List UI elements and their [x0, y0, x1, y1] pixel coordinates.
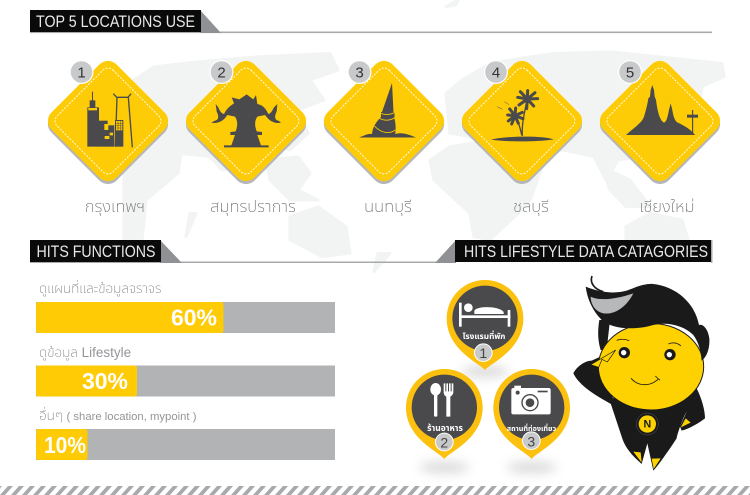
heading: hits lifestyle data categories: HITS LIFESTYLE DATA CATAGORIES [464, 242, 708, 261]
mascot [573, 276, 709, 471]
bar: others 10% [36, 406, 335, 460]
heading: hits functions [30, 240, 436, 263]
label: สมุทรปราการ [210, 198, 296, 217]
label: เชียงใหม่ [639, 198, 695, 216]
chest badge [636, 413, 658, 435]
eyes [619, 347, 676, 360]
bar: lifestyle 30%: ดูข้อมูล Lifestyle [39, 345, 131, 361]
heading: hits lifestyle data categories [435, 240, 712, 263]
location 3: Nonthaburi [319, 56, 449, 217]
bar: maps and traffic 60%: ดูแผนที่และข้อมูลจราจร [39, 279, 161, 297]
pin 3: attractions: 3 [527, 434, 535, 450]
chest badge: N [643, 419, 651, 431]
location 5: Chiang Mai [595, 56, 725, 216]
bar: others 10%: อื่นๆ ( share location, mypoint ) [39, 406, 197, 423]
number badge 3: 3 [355, 64, 364, 82]
heading: top 5 locations use [30, 10, 712, 33]
raised arm [573, 350, 615, 405]
pin 1: hotel: โรงแรมที่พัก [463, 330, 505, 341]
heading: hits functions: HITS FUNCTIONS [36, 242, 156, 261]
pin 1: hotel [447, 280, 523, 370]
pin 2: restaurant: 2 [440, 434, 448, 450]
bar: maps and traffic 60% [36, 279, 335, 333]
hair back sliver [598, 320, 610, 350]
hand right [681, 418, 691, 427]
curl [591, 276, 603, 292]
eyebrows and mouth [617, 339, 681, 385]
hair [586, 284, 709, 361]
icon: temple and sign [626, 85, 698, 135]
icon: spoon and fork [430, 383, 453, 417]
pin 2: restaurant [406, 369, 483, 459]
pin shadows [419, 366, 557, 473]
number badge 5: 5 [626, 64, 634, 82]
heading: top 5 locations use: TOP 5 LOCATIONS USE [36, 12, 195, 31]
bar: lifestyle 30% [36, 345, 335, 396]
label: กรุงเทพฯ [85, 198, 145, 217]
bar chart: hits functions [36, 279, 335, 460]
world map background [124, 0, 724, 272]
number badge 3 [348, 60, 372, 84]
bottom stripe band [0, 486, 750, 495]
number badge 1: 1 [77, 64, 86, 82]
location 4: Chonburi [457, 56, 587, 217]
hair highlight [591, 293, 633, 314]
pin 1: hotel: 1 [479, 345, 487, 361]
body [611, 388, 705, 471]
number badge 4 [484, 60, 508, 84]
bar: lifestyle 30%: 30% [82, 368, 128, 394]
lifestyle category pins [406, 280, 570, 473]
icon: palm island [491, 91, 554, 141]
bar: others 10%: 10% [44, 432, 86, 458]
icon: chedi [359, 83, 416, 138]
location 2: Samut Prakan [181, 56, 311, 217]
icon: bed [459, 303, 510, 327]
feet [633, 452, 661, 469]
face [598, 323, 704, 410]
hand over face [591, 350, 616, 367]
number badge 2 [210, 60, 234, 84]
bar: maps and traffic 60%: 60% [171, 304, 217, 330]
number badge 1 [70, 60, 94, 84]
number badge 2: 2 [217, 64, 226, 82]
icon: Erawan elephant [211, 94, 281, 147]
icon: camera [511, 388, 551, 414]
label: นนทบุรี [364, 198, 412, 217]
pin 2: restaurant: ร้านอาหาร [427, 423, 463, 433]
icon: Bangkok skyline [87, 92, 132, 147]
number badge 4: 4 [492, 64, 500, 82]
label: ชลบุรี [513, 198, 549, 217]
pin 3: attractions [493, 369, 570, 459]
pin 3: attractions: สถานที่ท่องเที่ยว [507, 423, 557, 433]
number badge 5 [618, 60, 642, 84]
location 1: Bangkok [43, 56, 173, 217]
